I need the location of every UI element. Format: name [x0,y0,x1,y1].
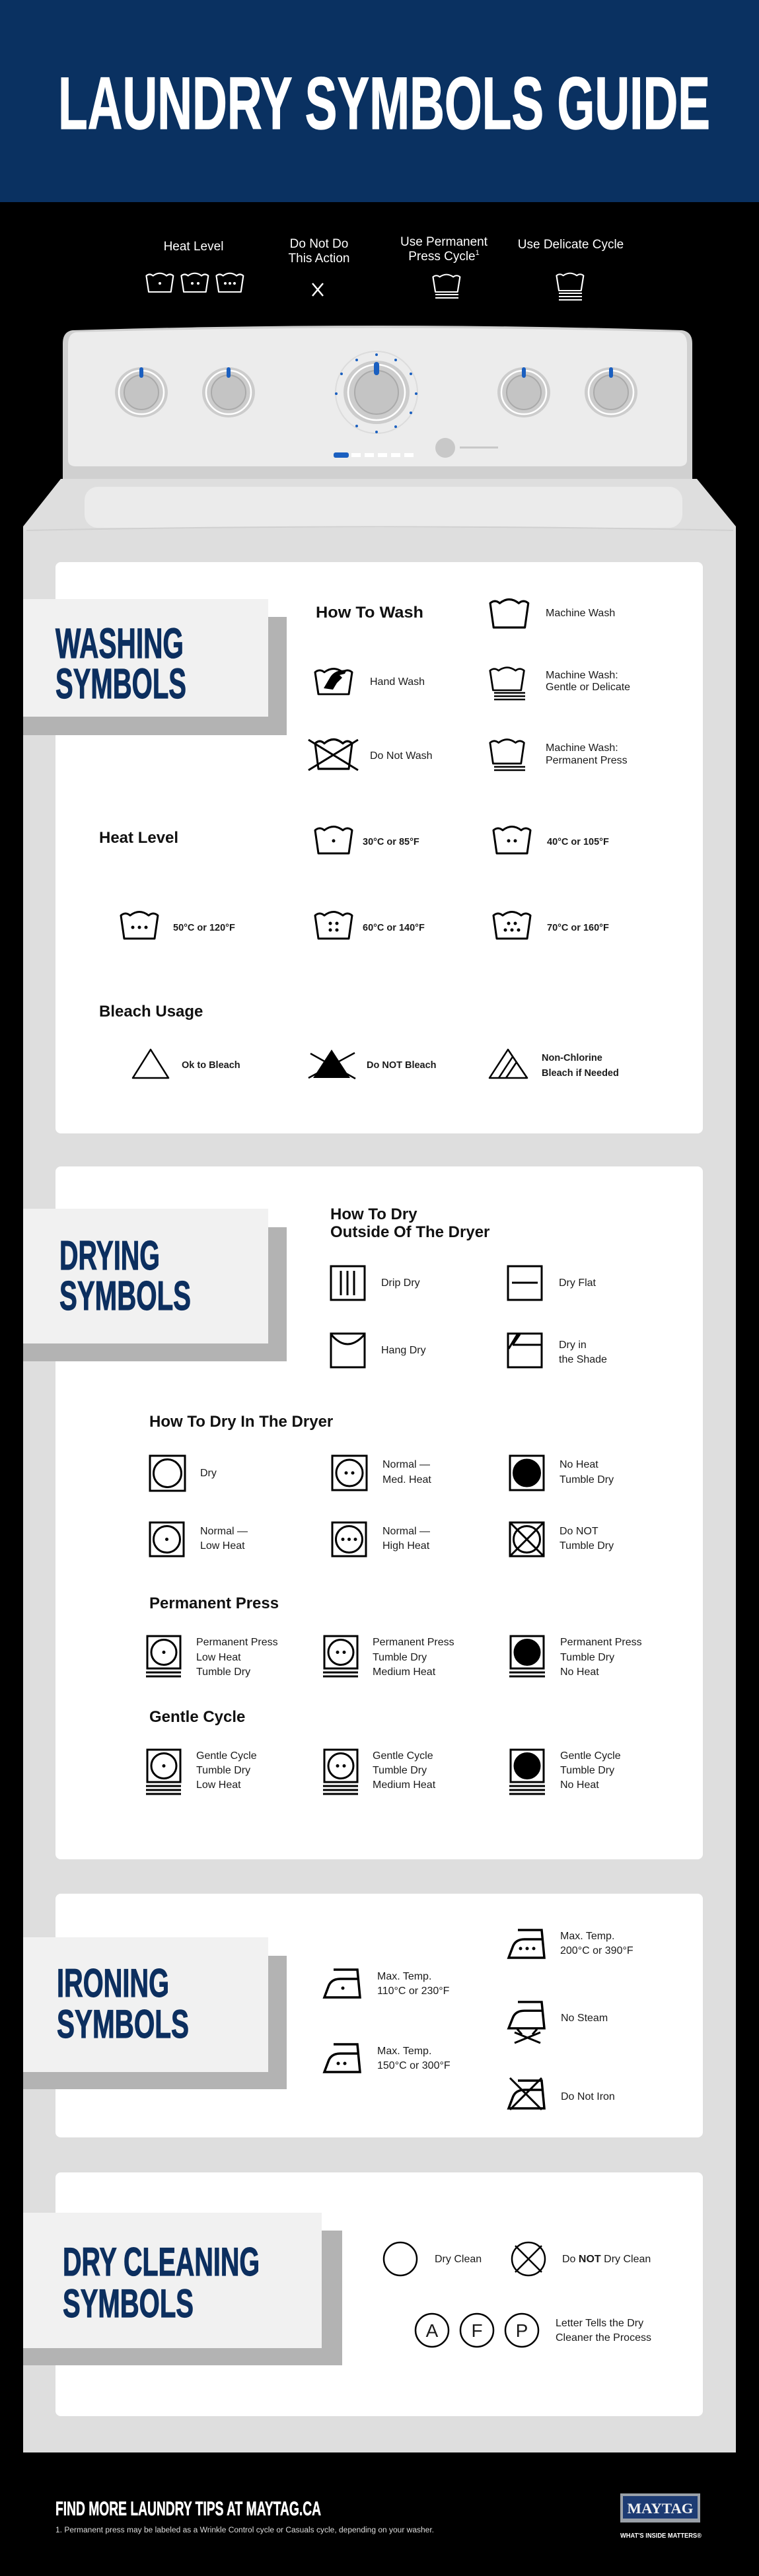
panel: drying: Dry in [559,1340,587,1351]
heading: bleach usage: Bleach Usage [99,1003,203,1020]
item: ok to bleach: Ok to Bleach [182,1060,240,1071]
legend: do not [289,237,349,296]
label: drying symbols [23,1209,287,1361]
item: iron med: 150°C or 300°F [377,2060,451,2071]
heading: outside dryer [330,1205,489,1241]
washer console with knobs [63,326,692,479]
item: do not dry clean [512,2242,651,2275]
item: no steam: No Steam [561,2013,608,2024]
panel: ironing [23,1894,703,2137]
panel: drying: Drip Dry [381,1277,420,1289]
item: gentle low [146,1750,181,1794]
panel: dry cleaning [23,2172,703,2416]
panel: drying: Permanent Press [373,1637,454,1648]
panel: drying: Tumble Dry [560,1765,614,1776]
item: iron low: 110°C or 230°F [377,1986,450,1997]
legend: permanent press: 1 [476,249,480,257]
item: letters: A [426,2320,439,2341]
panel: drying: Do NOT [560,1526,598,1537]
panel: drying: Tumble Dry [196,1666,250,1678]
panel: drying: Dry [200,1468,217,1479]
panel: drying: the Shade [559,1354,607,1365]
item: 50C [121,912,235,939]
label: drying symbols: DRYING [59,1233,160,1279]
panel: drying: Permanent Press [560,1637,642,1648]
panel: drying [23,1166,703,1859]
item: 30C [315,827,419,853]
logo: maytag: WHAT'S INSIDE MATTERS® [620,2532,702,2540]
legend: permanent press: Press Cycle [408,250,476,264]
item: do not iron [509,2078,615,2110]
item: pp no heat [509,1636,545,1676]
panel: drying: Normal — [382,1526,430,1537]
panel: drying: Medium Heat [373,1666,436,1678]
item: ok to bleach [133,1050,240,1078]
item: iron high [509,1930,633,1958]
item: do not bleach [308,1050,437,1079]
panel: drying: Normal — [382,1459,430,1470]
item: non-chlorine: Bleach if Needed [542,1068,619,1079]
item: high heat [332,1522,366,1556]
item: permanent press: Machine Wash: [546,742,618,754]
legend: symbol key [146,235,624,300]
item: low heat [150,1522,184,1556]
legend: do not: This Action [289,252,349,266]
item: gentle: Gentle or Delicate [546,682,630,693]
panel: drying: No Heat [560,1779,599,1791]
heading: how to wash: How To Wash [316,604,423,622]
item: hang dry [331,1334,365,1367]
item: 40C [493,827,609,853]
heading: heat level: Heat Level [99,829,178,847]
item: 70C [493,912,609,939]
item: hand wash: Hand Wash [370,676,425,688]
item: letters: F [471,2320,483,2341]
panel: drying: No Heat [560,1459,598,1470]
item: do not wash [308,739,433,770]
panel: drying: Tumble Dry [560,1540,614,1552]
item: dry clean: Dry Clean [435,2254,482,2265]
item: non-chlorine [489,1050,619,1079]
item: iron high: 200°C or 390°F [560,1945,633,1956]
item: do not bleach: Do NOT Bleach [367,1060,437,1071]
label: dry cleaning symbols: DRY CLEANING [63,2240,260,2284]
washer body [23,479,736,2452]
panel: drying: No Heat [560,1666,599,1678]
panel: drying: High Heat [382,1540,430,1552]
heading: outside dryer: How To Dry [330,1205,417,1223]
item: 70C: 70°C or 160°F [547,923,609,933]
item: do not dry clean: Do NOT Dry Clean [562,2254,651,2265]
label: washing symbols [23,599,287,735]
item: permanent press: Permanent Press [546,755,628,766]
knob center [335,351,417,433]
item: letters: P [516,2320,528,2341]
panel: drying: Gentle Cycle [196,1750,257,1762]
item: drip dry [331,1266,365,1300]
panel: drying: Low Heat [196,1779,241,1791]
item: 40C: 40°C or 105°F [547,837,609,847]
knob 5 [585,367,637,417]
item: 30C: 30°C or 85°F [363,837,419,847]
legend: heat level: Heat Level [164,240,223,254]
label: ironing symbols: SYMBOLS [57,2002,189,2046]
item: letters: Cleaner the Process [556,2332,651,2343]
legend: permanent press [400,235,488,298]
panel: drying: Tumble Dry [560,1474,614,1485]
item: dry flat [508,1266,542,1300]
item: no heat [510,1456,544,1490]
panel: drying: Normal — [200,1526,248,1537]
panel: drying: Gentle Cycle [373,1750,433,1762]
knob 4 [497,367,550,417]
panel: drying: Permanent Press [196,1637,278,1648]
item: pp low [146,1636,181,1676]
item: letters [416,2314,651,2347]
label: washing symbols: SYMBOLS [55,660,186,707]
item: dry [150,1456,185,1491]
item: iron low: Max. Temp. [377,1971,431,1982]
panel: drying: Medium Heat [373,1779,436,1791]
label: ironing symbols: IRONING [57,1961,169,2005]
footnote: 1. Permanent press may be labeled as a Wrinkle Control cycle or Casuals cycle, depending on your washer. [55,2526,434,2534]
item: no steam [509,2002,608,2043]
legend: permanent press: Use Permanent [400,235,488,249]
item: gentle: Machine Wash: [546,670,618,681]
item: dry in shade [508,1334,542,1367]
item: iron med: Max. Temp. [377,2046,431,2057]
item: 60C: 60°C or 140°F [363,923,425,933]
indicator lights [334,438,498,458]
item: letters: Letter Tells the Dry [556,2318,643,2329]
label: dry cleaning symbols: SYMBOLS [63,2281,194,2326]
logo: maytag: MAYTAG [628,2500,694,2517]
item: non-chlorine: Non-Chlorine [542,1053,602,1063]
item: gentle no heat [509,1750,545,1794]
item: 50C: 50°C or 120°F [173,923,235,933]
knob 1 [115,367,168,417]
item: iron low [324,1970,450,1997]
panel: drying: Low Heat [200,1540,245,1552]
heading: gentle cycle: Gentle Cycle [149,1708,245,1726]
panel: drying: Gentle Cycle [560,1750,621,1762]
legend: delicate: Use Delicate Cycle [518,238,624,252]
item: iron high: Max. Temp. [560,1931,614,1942]
item: do not wash: Do Not Wash [370,750,433,762]
logo: maytag [620,2493,702,2540]
panel: drying: Med. Heat [382,1474,431,1485]
item: gentle med [323,1750,358,1794]
legend: do not: Do Not Do [290,237,348,251]
footer: call to action: FIND MORE LAUNDRY TIPS AT MAYTAG.CA [55,2498,321,2520]
item: med heat [332,1456,367,1490]
heading: permanent press: Permanent Press [149,1594,279,1612]
item: pp med [323,1636,358,1676]
panel: drying: Tumble Dry [373,1765,427,1776]
label: dry cleaning symbols [23,2213,342,2365]
panel: drying: Dry Flat [559,1277,596,1289]
item: hand wash [315,669,425,694]
heading: in the dryer: How To Dry In The Dryer [149,1413,333,1431]
panel: drying: Tumble Dry [373,1652,427,1663]
panel: drying: Low Heat [196,1652,241,1663]
item: permanent press [490,740,628,770]
item: machine wash: Machine Wash [546,608,615,619]
header banner [0,0,759,202]
label: ironing symbols [23,1937,287,2089]
panel: drying: Tumble Dry [196,1765,250,1776]
item: iron med [324,2044,451,2072]
legend: delicate [518,238,624,300]
item: do not iron: Do Not Iron [561,2091,615,2102]
item: 60C [315,912,425,939]
label: drying symbols: SYMBOLS [59,1273,191,1319]
item: dry clean [384,2242,482,2275]
item: machine wash [490,599,615,627]
panel: drying: Hang Dry [381,1345,426,1356]
knob 2 [202,367,255,417]
heading: outside dryer: Outside Of The Dryer [330,1223,489,1241]
item: do not tumble [510,1522,544,1556]
label: washing symbols: WASHING [55,620,184,667]
panel: washing [23,562,703,1133]
item: gentle [490,668,630,699]
panel: drying: Tumble Dry [560,1652,614,1663]
legend: heat level [146,240,243,292]
